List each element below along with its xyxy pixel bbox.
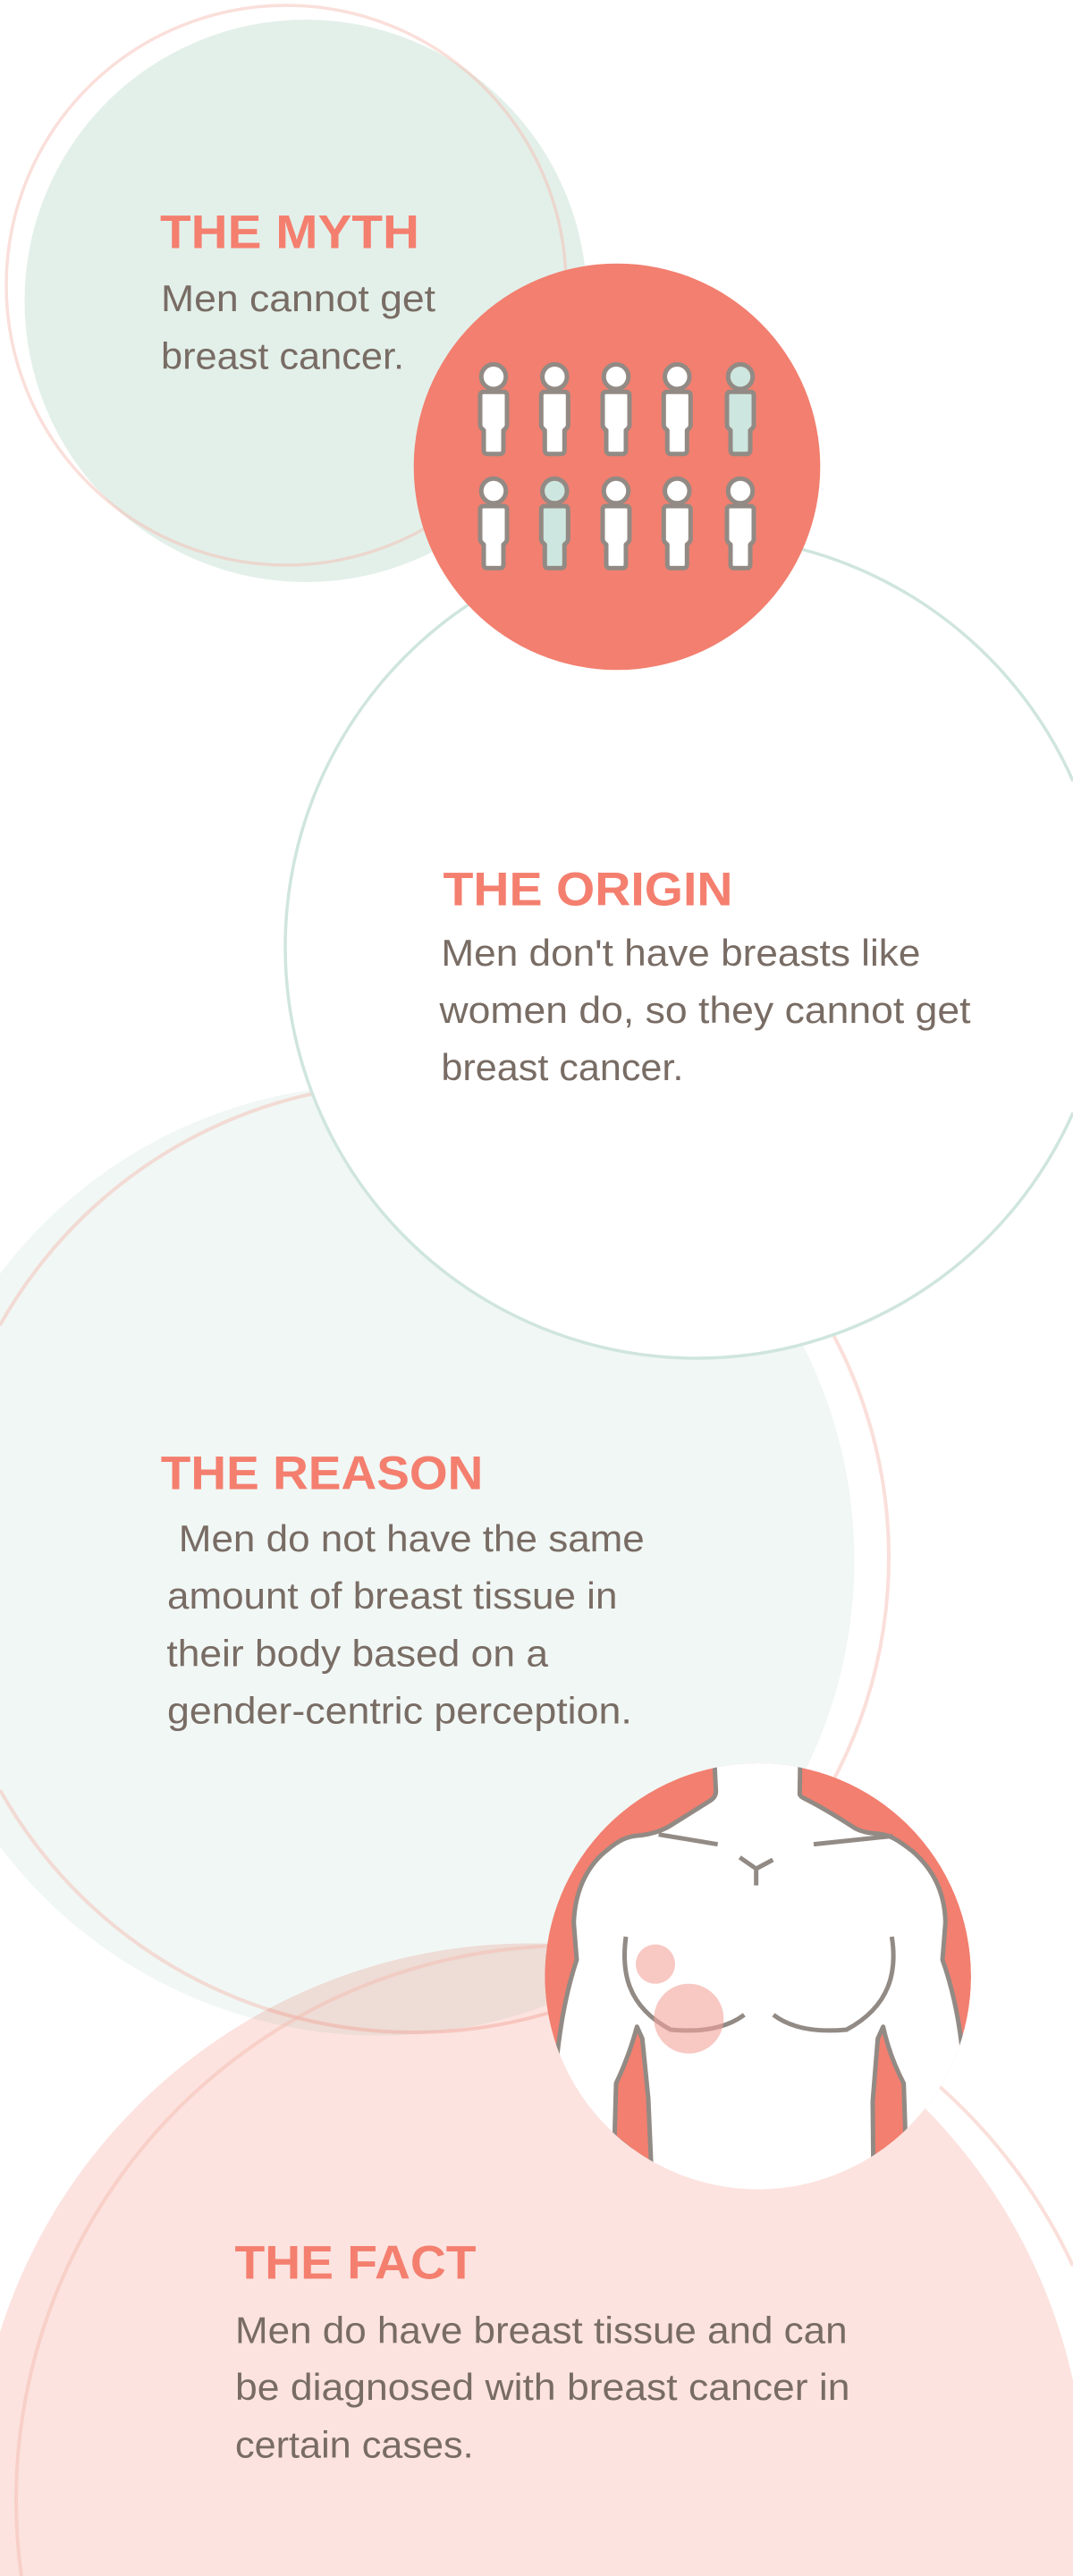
heading: the myth: THE MYTH	[160, 207, 419, 259]
icon: person row 1 col 1	[480, 365, 507, 454]
panel: fact background circle	[0, 1944, 1073, 2576]
icon: person row 1 col 2	[541, 365, 568, 454]
heading: the fact: THE FACT	[234, 2236, 476, 2289]
fact body text: be diagnosed with breast cancer in	[235, 2366, 849, 2408]
myth body text: breast cancer.	[161, 334, 404, 377]
icon: person row 1 col 4	[663, 365, 690, 454]
reason body text: Men do not have the same	[179, 1517, 645, 1559]
torso outline left	[557, 1755, 716, 2054]
text block: the reason	[161, 1448, 645, 1731]
text block: the fact	[234, 2236, 849, 2466]
large tumor spot	[654, 1984, 723, 2054]
torso white fill	[557, 1755, 968, 2197]
right side gap	[873, 2027, 906, 2164]
heading: the origin: THE ORIGIN	[444, 863, 733, 916]
fact body text: Men do have breast tissue and can	[235, 2310, 848, 2352]
panel: red circle with people icons	[414, 264, 820, 670]
origin body text: breast cancer.	[441, 1046, 683, 1088]
circle base	[545, 1763, 971, 2190]
left side gap	[614, 2027, 651, 2166]
origin body text: Men don't have breasts like	[441, 932, 920, 974]
myth outline circle	[6, 5, 566, 565]
icon: person row 2 col 1	[480, 478, 507, 568]
icon: person row 2 col 4	[663, 478, 690, 568]
left chest line	[624, 1937, 744, 2031]
fact outline circle	[16, 1946, 1073, 2576]
origin body text: women do, so they cannot get	[438, 989, 971, 1031]
collar lines	[659, 1835, 892, 1845]
icon: highlighted person row 2 col 2	[541, 478, 568, 568]
reason body text: their body based on a	[166, 1632, 549, 1674]
torso outline right	[799, 1755, 962, 2049]
icon: person row 1 col 3	[603, 365, 629, 454]
fact body text: certain cases.	[235, 2424, 474, 2466]
right chest line	[773, 1937, 893, 2031]
panel: origin circle	[285, 536, 1073, 1358]
text block: the origin	[438, 863, 971, 1088]
panel: reason background circle	[0, 1085, 854, 2035]
reason body text	[166, 1517, 645, 1731]
icon: male torso illustration	[545, 1755, 971, 2197]
sternum notch	[739, 1857, 773, 1886]
text block: the myth	[160, 207, 435, 377]
reason body text: gender-centric perception.	[167, 1689, 632, 1731]
icon: person row 2 col 3	[603, 478, 629, 568]
myth body text	[161, 277, 435, 377]
panel: myth background circle	[25, 20, 587, 582]
myth body text: Men cannot get	[161, 277, 435, 319]
heading: the reason: THE REASON	[161, 1448, 483, 1500]
reason body text: amount of breast tissue in	[167, 1575, 617, 1617]
icon: highlighted person row 1 col 5	[727, 365, 754, 454]
icon: person row 2 col 5	[727, 478, 754, 568]
origin body text	[438, 932, 971, 1088]
small tumor spot	[636, 1945, 675, 1984]
fact body text	[235, 2310, 849, 2466]
reason outline circle	[0, 1083, 889, 2032]
